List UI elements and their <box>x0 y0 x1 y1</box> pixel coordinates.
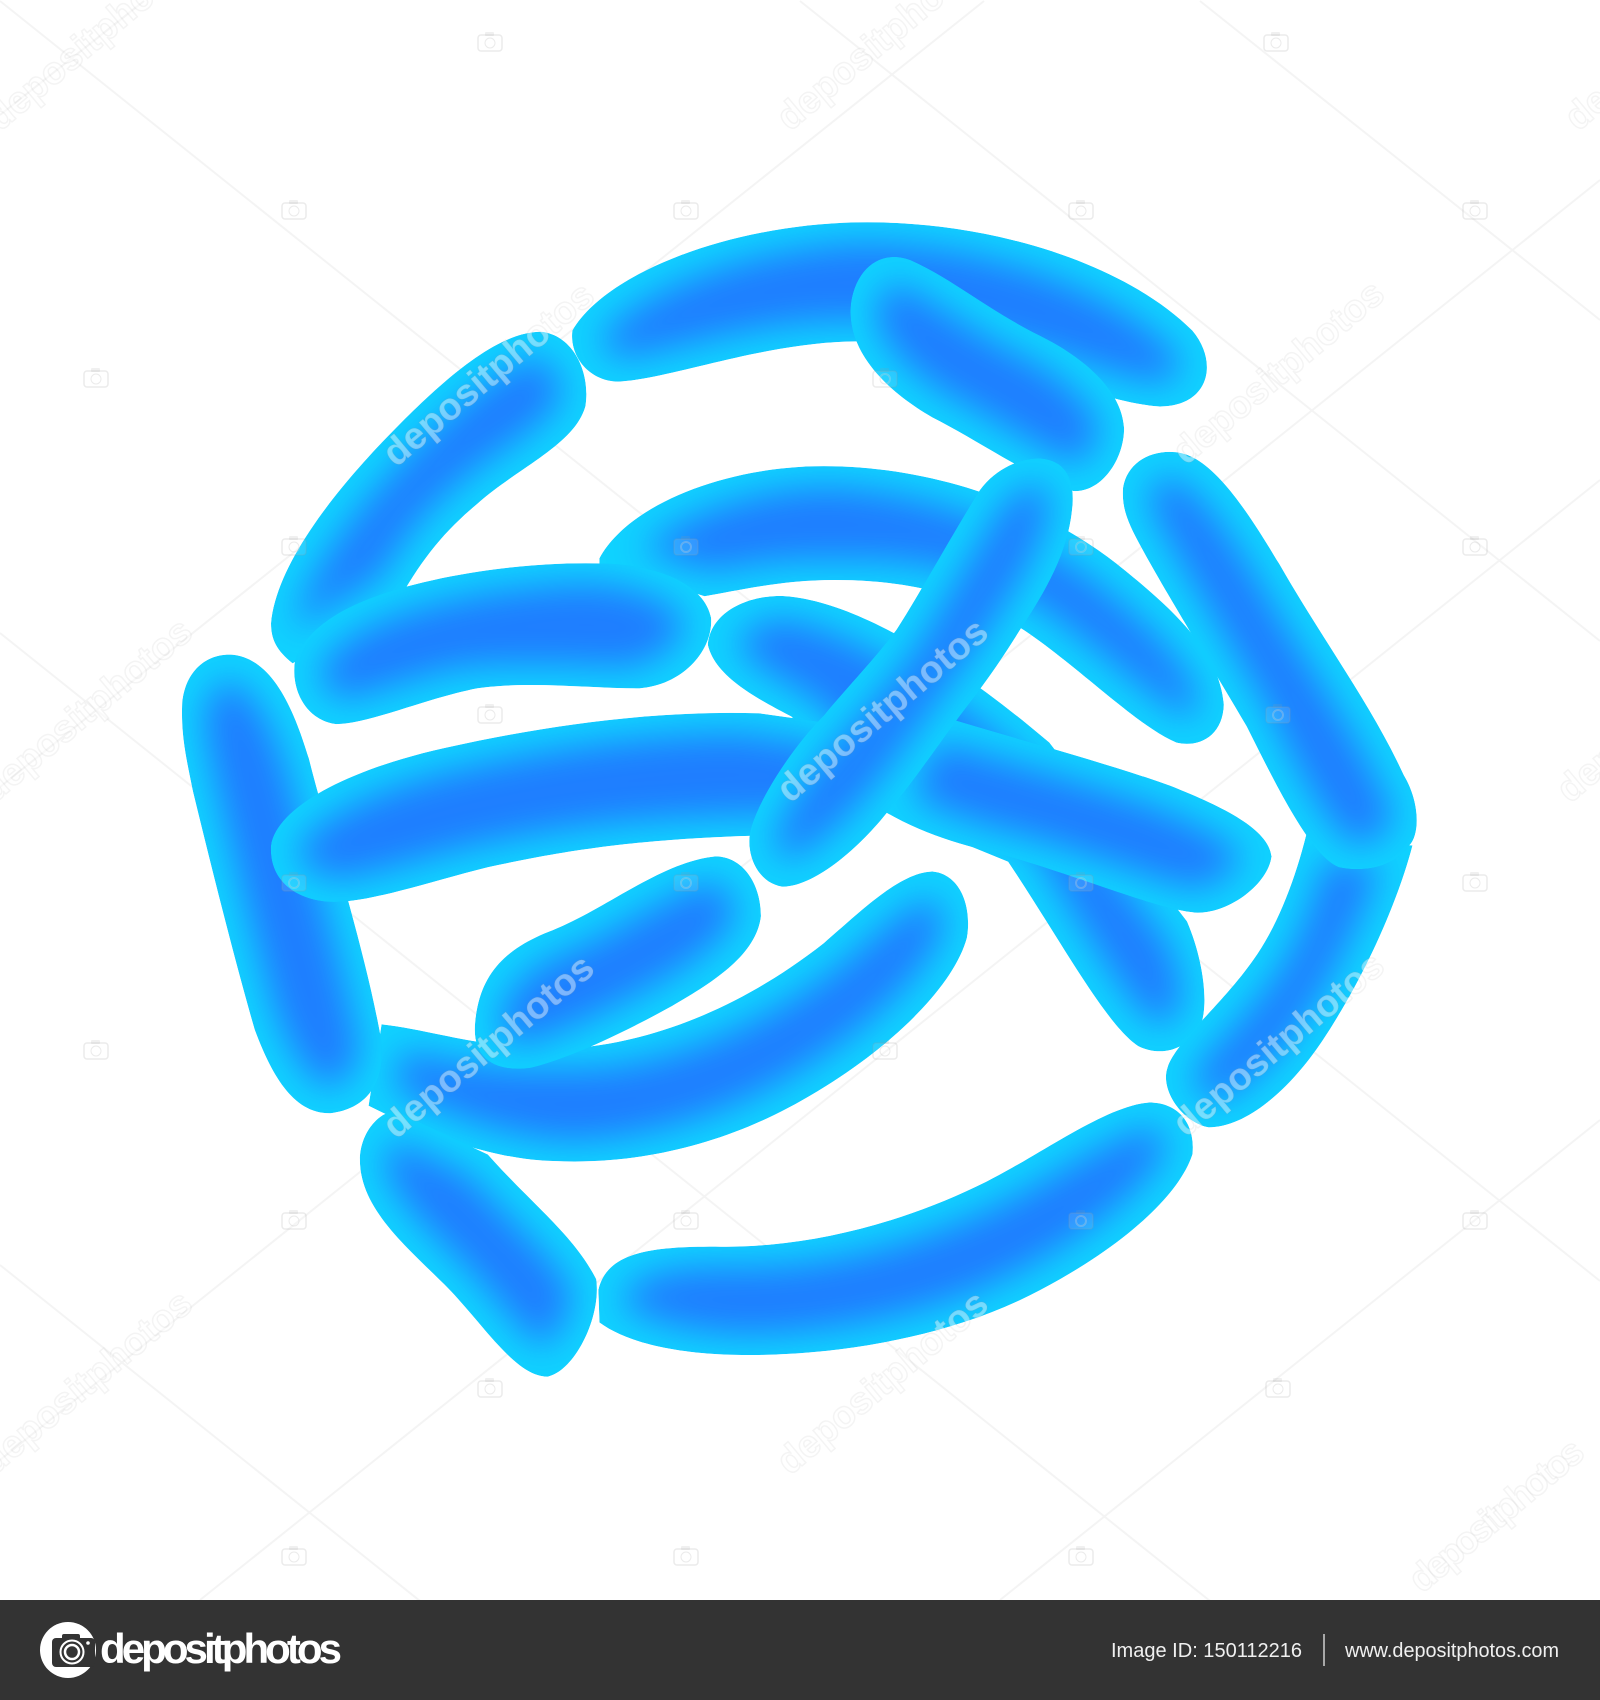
bacterium: long centre left <box>271 713 867 902</box>
bacteria cluster <box>182 222 1417 1377</box>
watermark texts: depositphotos <box>769 1282 996 1483</box>
bacterium: left middle <box>294 563 711 724</box>
bacterium: centre right <box>878 710 1272 913</box>
website url: www.depositphotos.com <box>1344 1640 1559 1662</box>
bacterium: bottom arc <box>598 1102 1193 1355</box>
bacterium: far left <box>182 655 382 1113</box>
bacterium: middle short <box>475 856 761 1069</box>
footer bar <box>0 1600 1600 1700</box>
watermark texts: depositphotos <box>1401 1431 1592 1601</box>
bacterium: middle arc <box>599 466 1224 744</box>
bacterium: lower right <box>1166 835 1412 1127</box>
bacterium: lower arc <box>369 872 968 1162</box>
watermark texts: depositphotos <box>375 946 602 1147</box>
bacterium: diagonal <box>749 458 1073 887</box>
watermark texts: depositphotos <box>1165 944 1392 1145</box>
watermark texts: depositphotos <box>1165 272 1392 473</box>
watermark camera icons <box>84 32 1487 1565</box>
icon: logo camera <box>40 1622 96 1678</box>
bacterium: centre right behind <box>708 596 1204 1051</box>
watermark texts: depositphotos <box>769 610 996 811</box>
bacterium: right <box>1123 452 1417 869</box>
bacterium: upper left <box>271 332 586 663</box>
bacterium: top short <box>850 257 1124 491</box>
logo wordmark: depositphotos <box>100 1625 342 1672</box>
bacterium: top long arc <box>572 222 1207 407</box>
bacterium: lower left <box>360 1111 597 1377</box>
image id: Image ID: 150112216 <box>1111 1640 1302 1662</box>
watermark texts: depositphotos <box>375 274 602 475</box>
